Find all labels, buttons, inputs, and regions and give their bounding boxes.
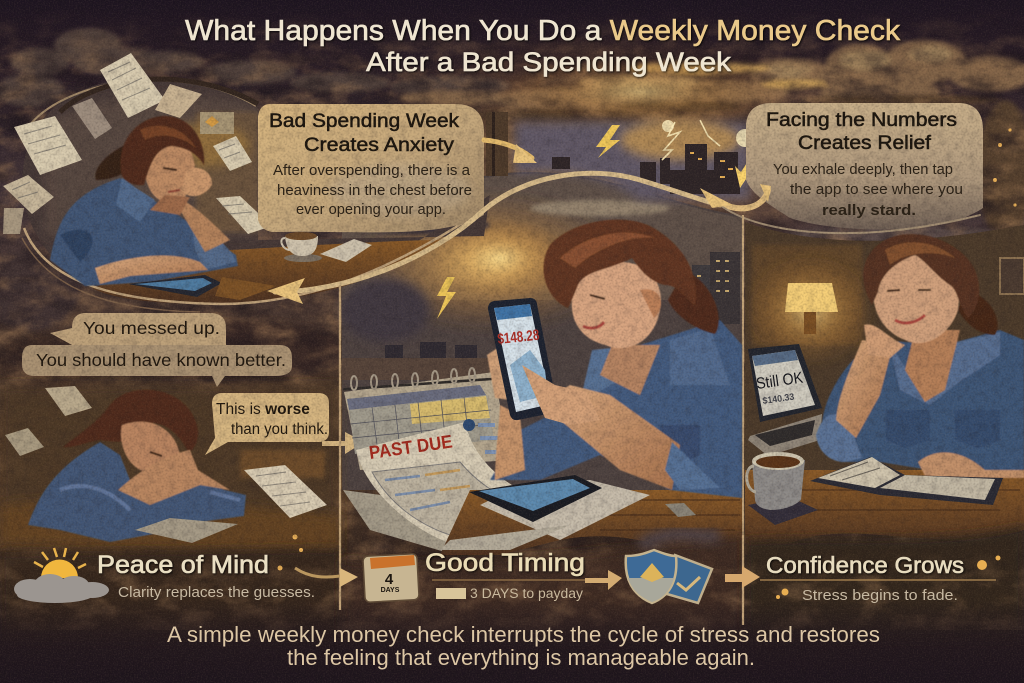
ponytail: woman three	[668, 270, 719, 334]
label: still ok: Still OK	[755, 370, 804, 393]
document: past due notice	[343, 419, 530, 552]
illustration: woman with head in hand	[50, 116, 238, 286]
text: bad spending week body	[273, 163, 472, 218]
speech bubble: you messed up	[50, 313, 226, 345]
face: woman four	[873, 255, 959, 343]
ponytail: woman four	[958, 290, 998, 335]
arrow: bubble to calendar	[322, 432, 364, 454]
panel: despair scene lower left	[0, 385, 339, 555]
table: worried scene	[92, 240, 440, 304]
text: facing the numbers body: really stard.	[822, 203, 916, 219]
panel: storm sky city band	[486, 112, 750, 200]
closing statement: A simple weekly money check interrupts the cycle of stress and restores	[167, 622, 880, 647]
connector: big swoosh arrow	[275, 140, 980, 292]
face: woman one	[145, 137, 195, 203]
shirt: woman four	[822, 330, 1024, 478]
callout: facing the numbers	[746, 103, 983, 230]
table: relief scene	[745, 470, 1024, 555]
arm: woman four	[836, 340, 893, 438]
text: facing the numbers body	[773, 162, 963, 219]
glow: golden light behind clouds	[490, 58, 790, 126]
heading: facing the numbers: Facing the Numbers	[766, 110, 957, 131]
title	[185, 15, 901, 77]
face: woman two	[121, 422, 180, 473]
hand: woman one	[182, 168, 212, 196]
title: After a Bad Spending Week	[366, 47, 732, 77]
icon: notebook under arm	[135, 518, 238, 543]
heading: peace of mind: Peace of Mind	[97, 551, 269, 579]
closing statement: the feeling that everything is manageable again.	[287, 645, 755, 670]
icon: lightning bolts in sky	[437, 120, 754, 319]
closing statement	[167, 622, 880, 670]
icon: open journal	[810, 457, 1003, 505]
label: phone balance: $148.28	[497, 327, 540, 348]
shirt: woman one	[50, 178, 238, 286]
icon: laptop still ok	[748, 344, 822, 456]
clouds: right and left side	[0, 100, 1024, 388]
icon: shield and check card	[626, 550, 712, 603]
forearm: woman four	[918, 452, 1024, 478]
text: bad spending week body: After overspending, there is a	[273, 163, 471, 179]
text: facing the numbers body: You exhale deeply, then tap	[773, 162, 953, 178]
arm: woman one	[95, 255, 208, 284]
hand: pointing finger	[522, 365, 600, 425]
illustration: smiling woman	[816, 234, 1024, 478]
icon: sparks	[776, 556, 1000, 599]
footer item: good timing	[363, 549, 600, 602]
speech bubble: you messed up: You messed up.	[83, 318, 220, 338]
heading: bad spending week: Bad Spending Week	[269, 110, 459, 132]
hair: woman one	[121, 116, 204, 185]
table: middle scene	[440, 480, 742, 560]
icon: floating paper	[244, 465, 327, 518]
callout: bad spending week	[258, 104, 484, 232]
arrow: shield to confidence	[725, 566, 760, 588]
label: past due: PAST DUE	[368, 430, 454, 463]
panel: worried scene oval	[22, 77, 512, 312]
neck: woman four	[905, 330, 960, 402]
arm: woman two	[118, 450, 230, 505]
panel: relief scene room	[744, 222, 1024, 480]
speech bubble: this is worse: This is worse	[216, 401, 310, 418]
dividers: panel rules	[340, 215, 743, 625]
hair: woman three	[543, 220, 696, 308]
speech bubble: this is worse: than you think.	[231, 421, 328, 438]
calendar: wall planner	[343, 368, 510, 470]
icon: coffee cup and saucer	[281, 232, 372, 262]
footer item: peace of mind	[14, 548, 315, 603]
clouds: top band	[0, 28, 1024, 136]
icon: tablet on table	[128, 275, 277, 300]
text: days to payday: 3 DAYS to payday	[470, 586, 583, 601]
heading: bad spending week: Creates Anxiety	[304, 134, 454, 156]
skyline: middle window	[342, 252, 740, 380]
panel: middle scene backdrop	[340, 172, 742, 490]
speech bubble: you should have known better	[22, 345, 292, 387]
speech bubble: this is worse	[205, 393, 329, 455]
neck: woman three	[600, 345, 660, 395]
arrowheads: swoosh	[267, 144, 771, 304]
icon: four days calendar: 4	[385, 571, 394, 588]
heading: facing the numbers	[766, 110, 957, 154]
heading: bad spending week	[269, 110, 459, 156]
icon: sun behind cloud	[14, 548, 109, 603]
text: bad spending week body: ever opening your app.	[296, 202, 446, 218]
speech bubble: you should have known better: You should have known better.	[36, 350, 286, 370]
icon: phone with balance	[488, 298, 557, 420]
shirt: woman two	[28, 442, 246, 542]
hair: woman four	[863, 234, 979, 318]
heading: facing the numbers: Creates Relief	[798, 133, 932, 154]
hair: woman two	[63, 390, 198, 452]
heading: good timing: Good Timing	[425, 549, 585, 577]
title: What Happens When You Do a Weekly Money Check	[185, 15, 901, 47]
illustration: woman resting head on arms	[28, 390, 246, 542]
icon: phone on table	[469, 475, 602, 522]
heading: confidence grows: Confidence Grows	[766, 552, 964, 578]
footer item: confidence grows	[760, 552, 1000, 604]
text: peace of mind note: Clarity replaces the guesses.	[118, 585, 315, 601]
forearm: woman three	[545, 385, 680, 490]
illustration: woman checking phone	[487, 220, 742, 498]
text: stress fades: Stress begins to fade.	[802, 588, 958, 604]
icon: four days calendar	[363, 554, 419, 602]
ponytail: woman one	[95, 145, 135, 180]
arrow: timing to shield	[585, 570, 622, 590]
icon: laptop still ok: $140.33	[762, 392, 795, 407]
icon: coffee mug	[747, 452, 818, 525]
face: woman three	[572, 262, 661, 348]
shirt: woman three	[490, 320, 742, 498]
arrow: peace to timing	[295, 568, 358, 587]
text: facing the numbers body: the app to see where you	[790, 182, 963, 198]
icon: four days calendar: DAYS	[381, 587, 400, 594]
icon: scattered receipts	[3, 53, 272, 234]
text: bad spending week body: heaviness in the chest before	[277, 183, 472, 199]
